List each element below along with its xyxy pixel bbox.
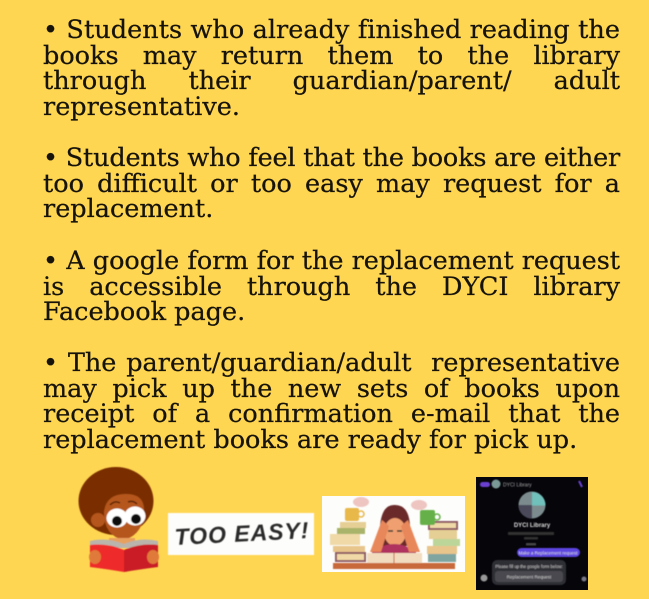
text block: replacement request: too difficult or too easy may request for a: [43, 169, 620, 199]
text block: google form: Facebook page.: [43, 297, 245, 327]
text block: google form: is accessible through the DYCI library: [43, 272, 620, 302]
image: DYCI Library messenger screenshot: DYCI Library: [514, 523, 551, 529]
text block: returning books: representative.: [43, 92, 240, 122]
text block: returning books: • Students who already finished reading the: [43, 15, 620, 45]
text block: returning books: books may return them to the library: [43, 41, 620, 71]
text block: picking up new books: [43, 348, 620, 455]
text block: picking up new books: replacement books are ready for pick up.: [43, 425, 577, 455]
text block: replacement request: • Students who feel that the books are either: [43, 143, 620, 173]
image: DYCI Library messenger screenshot: Please fill up the google form below:: [495, 564, 563, 569]
label: too easy: TOO EASY!: [174, 517, 309, 550]
text block: picking up new books: may pick up the new sets of books upon: [43, 374, 620, 404]
text block: replacement request: replacement.: [43, 194, 213, 224]
image: DYCI Library messenger screenshot: Make a Replacement request: [519, 550, 578, 556]
image: DYCI Library messenger screenshot: DYCI Library: [503, 482, 532, 488]
text block: google form: [43, 246, 620, 327]
text block: google form: • A google form for the replacement request: [43, 246, 620, 276]
text block: picking up new books: receipt of a confirmation e-mail that the: [43, 399, 620, 429]
image: stressed student among stacks of books: [322, 496, 465, 572]
image: DYCI Library messenger screenshot: Replacement Request: [507, 574, 552, 580]
text block: returning books: [43, 15, 620, 122]
image: DYCI Library messenger screenshot: [476, 477, 588, 590]
text block: picking up new books: • The parent/guardian/adult representative: [43, 348, 620, 378]
text block: replacement request: [43, 143, 620, 224]
text block: returning books: through their guardian/parent/ adult: [43, 66, 620, 96]
